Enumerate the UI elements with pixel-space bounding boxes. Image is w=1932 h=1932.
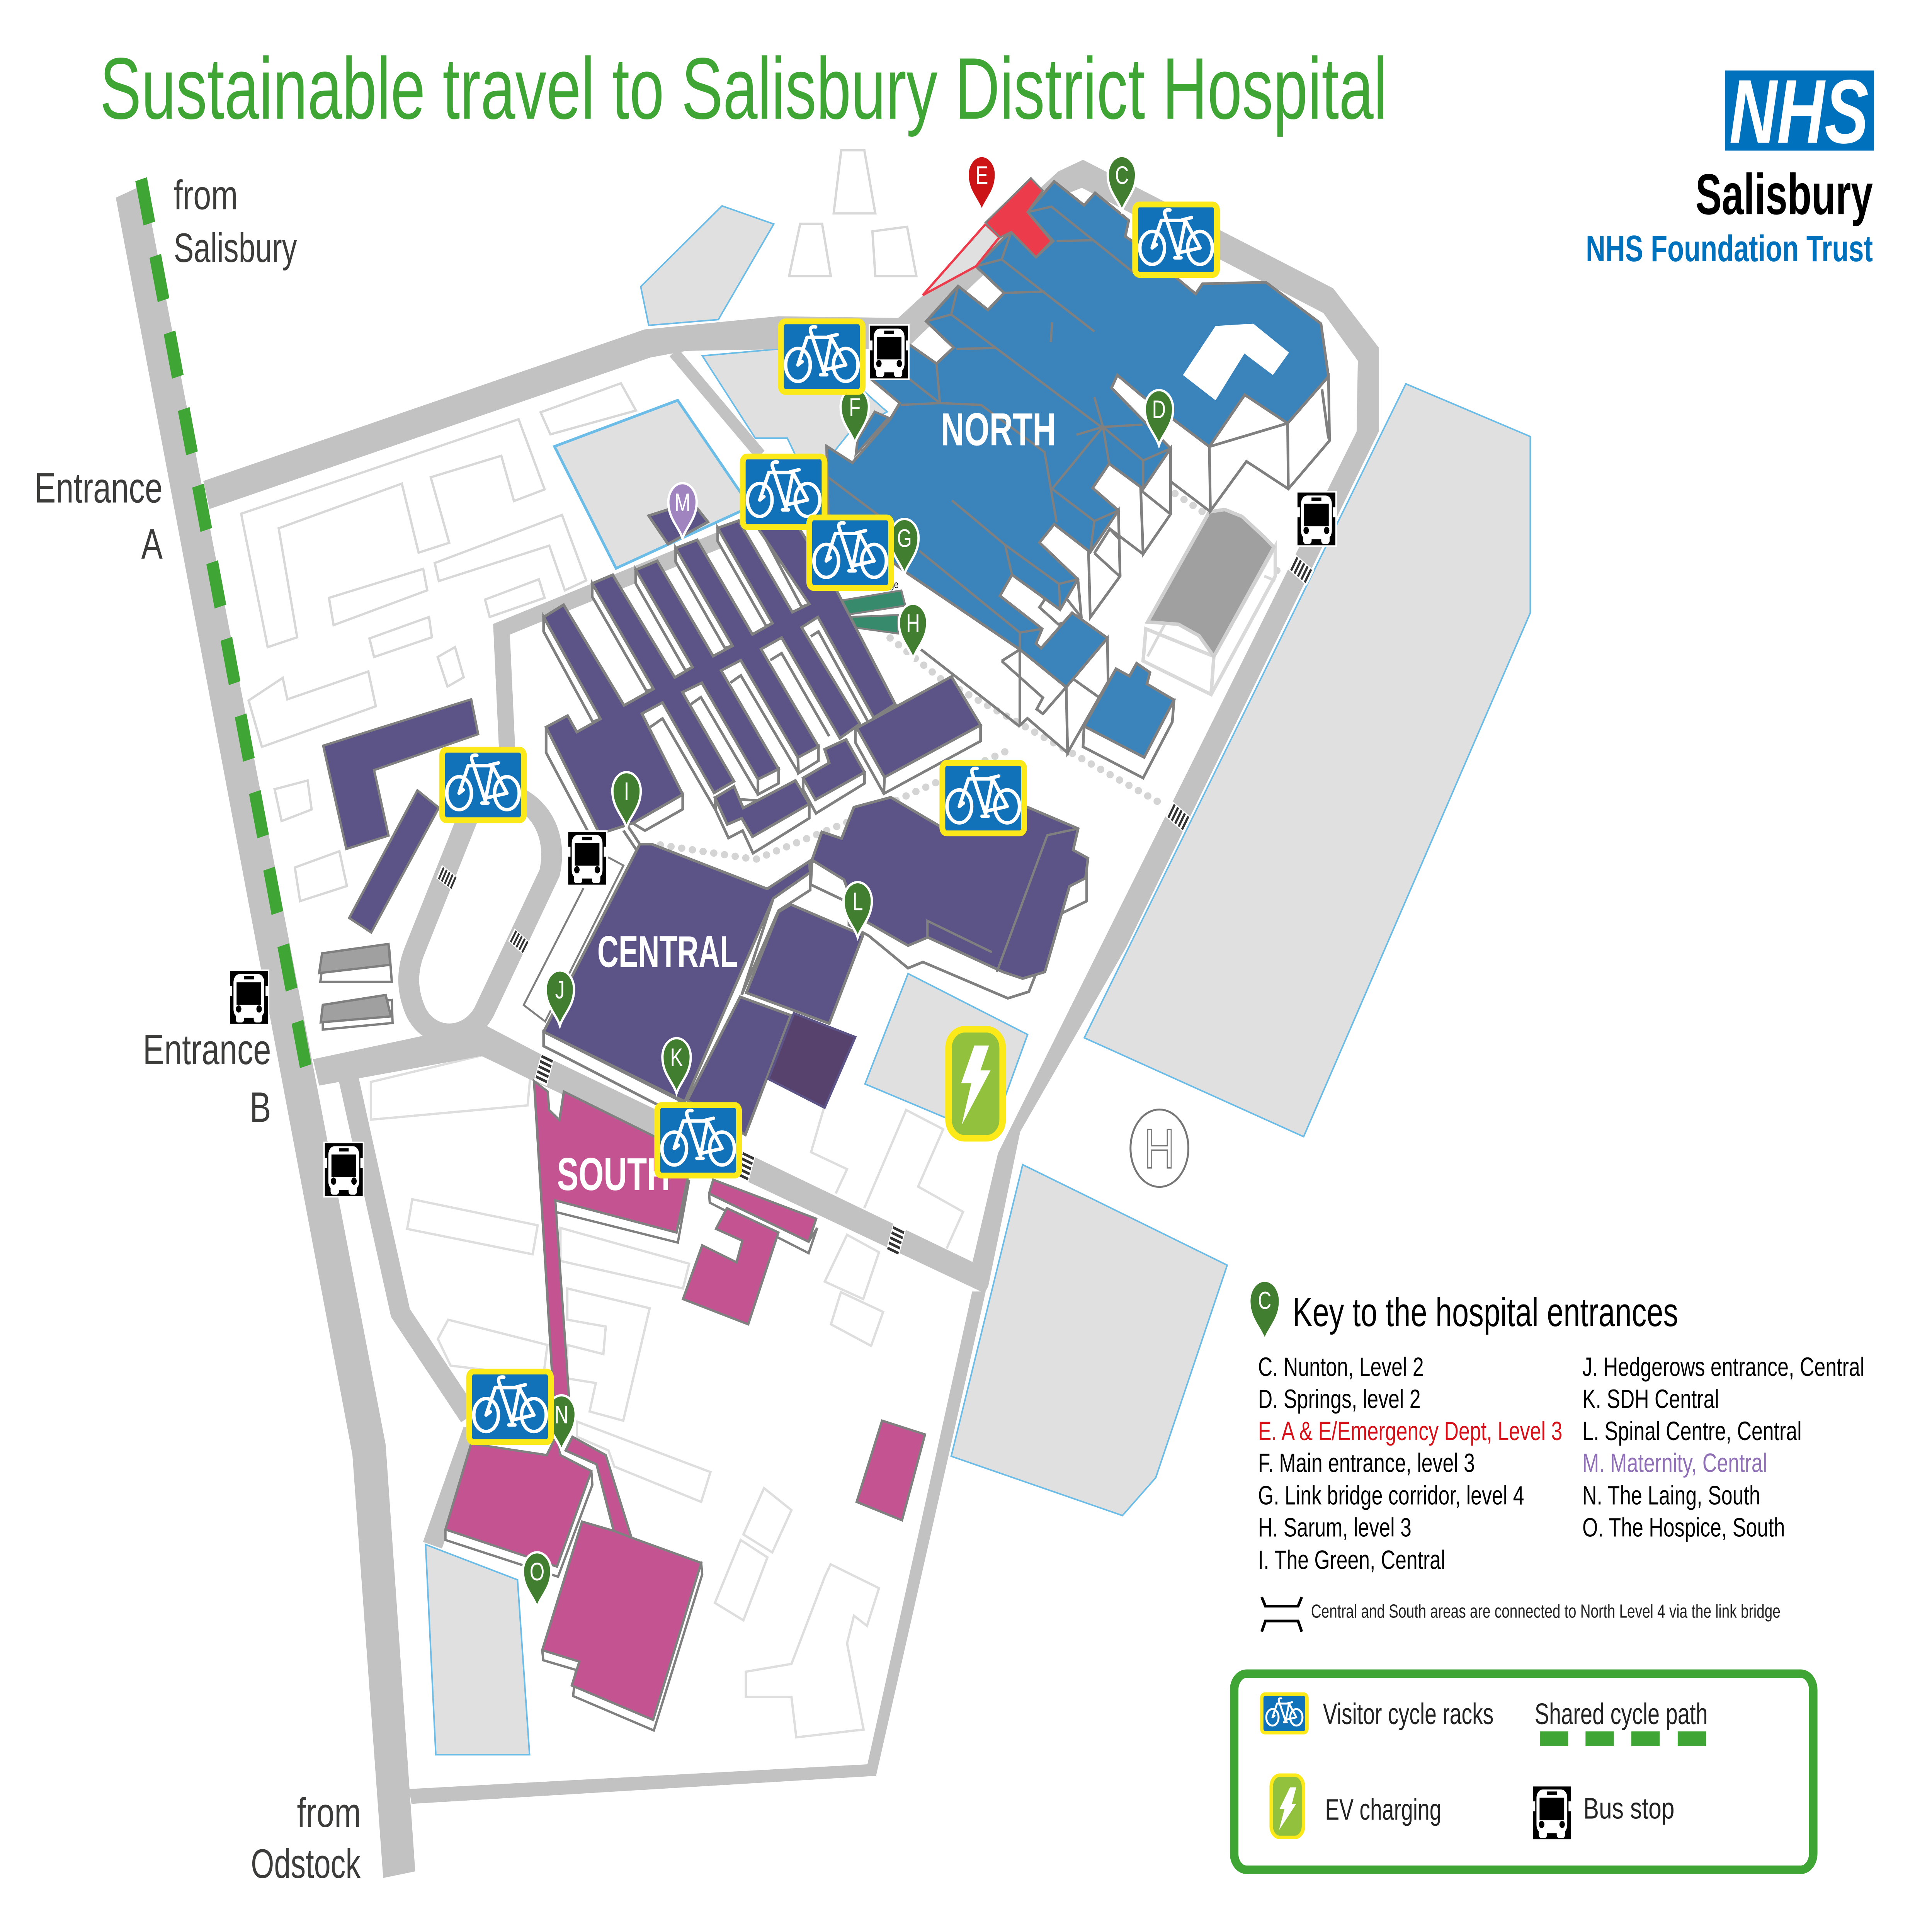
entrance pins: I: [624, 777, 629, 806]
outline buildings: north-west: [241, 150, 917, 901]
central zone: east block walls: [811, 862, 1087, 998]
key list: right column: J. Hedgerows entrance, Central: [1582, 1352, 1864, 1382]
logo: NHS Salisbury: Salisbury: [1696, 162, 1873, 226]
key heading with pin: Key to the hospital entrances: [1293, 1290, 1678, 1335]
road label: from Salisbury: [174, 172, 297, 271]
key list: left column: H. Sarum, level 3: [1258, 1512, 1412, 1542]
visitor cycle racks: [442, 204, 1217, 1442]
key list: left column: E. A & E/Emergency Dept, Level 3: [1258, 1416, 1562, 1446]
north zone: extruded walls: [921, 376, 1330, 778]
key heading with pin: [1249, 1281, 1678, 1340]
entrance pins: L: [852, 888, 863, 916]
north zone: main building: [827, 181, 1328, 687]
central zone: wards small blocks: [649, 509, 981, 837]
road label: from Salisbury: from: [174, 172, 238, 218]
helipad: H: [1144, 1117, 1175, 1180]
multi-storey car park: [1143, 510, 1275, 694]
entrance pins: N: [554, 1401, 568, 1429]
key list: left column: F. Main entrance, level 3: [1258, 1448, 1475, 1478]
link bridge note: [1262, 1597, 1781, 1632]
shared cycle path: [135, 177, 311, 1068]
key list: right column: O. The Hospice, South: [1582, 1512, 1785, 1542]
road label: Entrance B: Entrance: [143, 1025, 271, 1073]
key list: left column: D. Springs, level 2: [1258, 1384, 1421, 1414]
road label: from Odstock: Odstock: [251, 1841, 361, 1887]
pedestrian crossings: [436, 554, 1314, 1257]
north zone: small block: [1084, 663, 1174, 757]
entrance pins: M: [675, 488, 690, 517]
emergency department: [923, 178, 1051, 295]
key list: left column: C. Nunton, Level 2: [1258, 1352, 1424, 1382]
central zone: walls: [544, 861, 810, 1108]
outline buildings: south: [371, 1055, 963, 1737]
walking routes: [660, 493, 1285, 859]
legend: bus stop: Bus stop: [1583, 1793, 1675, 1825]
key list: left column: G. Link bridge corridor, level 4: [1258, 1480, 1524, 1510]
entrance pins: D: [1152, 395, 1166, 424]
entrance pins: H: [906, 609, 920, 638]
central zone: spinal centre block: [746, 905, 863, 1024]
icon: EV charging: [949, 1029, 1003, 1138]
legend: bus stop: [1532, 1786, 1675, 1840]
hidden link bridge label fragment: ge: [889, 579, 898, 591]
logo: NHS Salisbury: NHS Foundation Trust: [1586, 228, 1873, 269]
link bridge note: Central and South areas are connected to North Level 4 via the link bridge: [1311, 1601, 1781, 1622]
logo: NHS Salisbury: [1586, 61, 1874, 269]
key list: left column: I. The Green, Central: [1258, 1545, 1445, 1575]
central zone: east block: [812, 797, 1088, 978]
central zone: ward wing walls: [544, 528, 981, 853]
zone label: SOUTH: SOUTH: [557, 1149, 670, 1200]
north zone: entrance wing near F: [856, 412, 888, 454]
zone label: NORTH: NORTH: [941, 404, 1056, 455]
north zone: internal wing lines: [828, 207, 1170, 650]
legend: visitor cycle racks: [1262, 1694, 1493, 1733]
central zone: main block: [544, 844, 810, 1102]
key list: left column: [1258, 1352, 1562, 1575]
entrance pins: G: [897, 524, 912, 553]
road label: Entrance A: [34, 464, 163, 568]
entrance pins: J: [555, 976, 565, 1004]
key list: right column: K. SDH Central: [1582, 1384, 1719, 1414]
car parks: [425, 206, 1530, 1755]
key list: right column: [1582, 1352, 1864, 1542]
north zone: courtyard: [1183, 324, 1289, 400]
entrance pins: E: [975, 161, 988, 190]
logo: NHS Salisbury: NHS: [1729, 61, 1869, 162]
central zone: bus bay outline: [524, 857, 624, 1022]
key heading with pin: C: [1258, 1287, 1271, 1314]
road label: Entrance A: Entrance: [34, 464, 163, 512]
legend: EV charging: EV charging: [1325, 1794, 1442, 1827]
road label: Entrance A: A: [141, 519, 163, 568]
legend: shared cycle path: [1535, 1698, 1708, 1746]
entrance pins: K: [670, 1043, 683, 1072]
entrance pins: [523, 156, 1173, 1607]
legend: EV charging: [1271, 1775, 1442, 1837]
title: Sustainable travel to Salisbury District Hospital: [100, 40, 1388, 138]
zone label: CENTRAL: CENTRAL: [597, 927, 738, 976]
central zone: wards comb: [544, 517, 895, 834]
car park bays: [319, 944, 393, 1030]
road label: from Odstock: [251, 1790, 361, 1887]
bus stops: [229, 325, 1336, 1197]
south zone: buildings: [446, 1081, 925, 1730]
key list: right column: M. Maternity, Central: [1582, 1448, 1767, 1478]
entrance pins: O: [530, 1558, 544, 1586]
legend: visitor cycle racks: Visitor cycle racks: [1323, 1698, 1493, 1731]
roads: [116, 160, 1379, 1878]
road label: Entrance B: B: [250, 1083, 271, 1131]
helipad: [1131, 1109, 1189, 1187]
central zone: dark block: [769, 1013, 855, 1108]
entrance pins: C: [1115, 161, 1129, 190]
link bridge corridors: [835, 590, 905, 634]
road label: Entrance B: [143, 1025, 271, 1131]
central zone: lower block: [687, 997, 791, 1135]
entrance pins: F: [849, 393, 861, 422]
road label: from Salisbury: Salisbury: [174, 225, 297, 271]
key list: right column: N. The Laing, South: [1582, 1480, 1760, 1510]
central zone: west blocks: [323, 699, 478, 932]
legend: shared cycle path: Shared cycle path: [1535, 1698, 1708, 1731]
key list: right column: L. Spinal Centre, Central: [1582, 1416, 1802, 1446]
road label: from Odstock: from: [297, 1790, 361, 1836]
legend panel: [1234, 1674, 1813, 1870]
